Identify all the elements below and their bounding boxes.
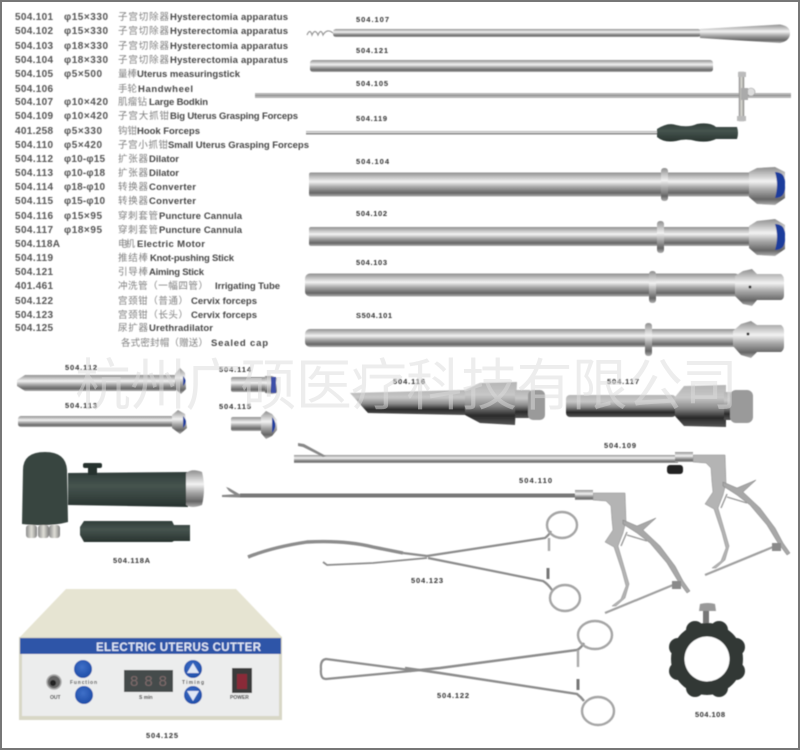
row 504.109: Big Uterus Grasping Forceps — [170, 111, 298, 122]
row 504.119: Knot-pushing Stick — [150, 253, 235, 264]
timing buttons — [182, 660, 204, 704]
row 504.105: φ5×500 — [64, 69, 102, 80]
row 504.116: φ15×95 — [64, 211, 102, 222]
instrument: 504.113 dilator: 504.113 — [65, 401, 97, 410]
instrument: 504.109 big grasping forceps — [294, 441, 790, 575]
row 504.102 — [15, 25, 288, 37]
instrument: 504.107 large bodkin: 504.107 — [356, 15, 389, 24]
row 504.112 — [15, 153, 179, 165]
instrument: 504.118A electric motor — [22, 452, 204, 565]
row 504.122 — [15, 295, 257, 307]
row 401.258 — [15, 125, 200, 137]
row 504.106 — [15, 83, 193, 95]
watermark: 杭州广硕医疗科技有限公司 — [75, 354, 738, 417]
row 401.461: 401.461 — [15, 281, 53, 292]
instrument: 504.114 converter: 504.114 — [219, 365, 252, 374]
row 504.101: 504.101 — [15, 12, 53, 23]
row 504.113: Dilator — [149, 168, 179, 179]
row 504.125: 尿扩器 — [118, 322, 148, 334]
row 504.114: Converter — [149, 182, 196, 193]
row 504.117: 504.117 — [15, 225, 53, 236]
row 504.103: Hysterectomia apparatus — [170, 41, 288, 52]
instrument: 504.110 small grasping forceps: 504.110 — [519, 476, 552, 485]
row 504.116: 504.116 — [15, 211, 53, 222]
instrument: 504.105 measuring stick: 504.105 — [356, 79, 388, 88]
instrument: 504.122 cervix forceps: 504.122 — [437, 691, 469, 700]
row 504.104: 子宫切除器 — [118, 54, 169, 66]
instrument: 504.123 cervix forceps long: 504.123 — [411, 576, 443, 585]
row 504.101: φ15×330 — [64, 12, 108, 23]
row 504.115: φ15-φ10 — [64, 196, 105, 207]
row 504.115: Converter — [149, 196, 196, 207]
row 504.122: 504.122 — [15, 296, 53, 307]
console title: ELECTRIC UTERUS CUTTER — [96, 642, 262, 654]
row 504.104: 504.104 — [15, 55, 53, 66]
row 504.106: Handwheel — [138, 84, 193, 95]
row 504.105: 量棒 — [118, 68, 137, 80]
instrument: 504.108 sealed wheel — [669, 603, 745, 719]
row 504.113: φ10-φ18 — [64, 168, 105, 179]
row 504.112: 504.112 — [15, 154, 53, 165]
row 504.119: 推结棒 — [118, 252, 148, 264]
instrument: 504.112 dilator: 504.112 — [65, 363, 97, 372]
row 401.258: φ5×330 — [64, 126, 102, 137]
power switch — [230, 668, 252, 701]
row 504.121: 引导棒 — [118, 266, 148, 278]
instrument: 504.112 dilator — [17, 363, 186, 394]
row 504.112: Dilator — [149, 154, 179, 165]
instrument: 504.113 dilator — [18, 401, 187, 434]
instrument: 504.105 measuring stick — [255, 72, 791, 121]
power switch: POWER — [230, 695, 249, 701]
row 504.119: 504.119 — [15, 253, 53, 264]
row 504.109: 子宫大抓钳 — [118, 110, 169, 122]
row 504.101 — [15, 11, 288, 23]
row 504.117: 穿刺套管 — [118, 224, 158, 236]
row 504.103: φ18×330 — [64, 41, 108, 52]
row 504.125: 504.125 — [15, 323, 53, 334]
row 504.118A — [15, 238, 205, 250]
row 504.117: Puncture Cannula — [159, 225, 243, 236]
row 504.103: 子宫切除器 — [118, 40, 169, 52]
digital display: S min — [139, 695, 153, 701]
row 504.121: 504.121 — [15, 267, 53, 278]
row 504.103 — [15, 40, 288, 52]
row 504.114 — [15, 181, 196, 193]
row 504.102: 504.102 — [15, 26, 53, 37]
instrument: 504.101 hysterectomy tube — [305, 311, 784, 358]
instrument: 504.114 converter — [219, 365, 277, 394]
row 504.118A: 电机 — [118, 238, 135, 250]
row 504.112: φ10-φ15 — [64, 154, 105, 165]
instrument: 504.102 hysterectomy tube: 504.102 — [356, 209, 387, 218]
row 504.119 — [15, 252, 235, 264]
instrument: 504.119 knot-pushing stick — [306, 114, 738, 142]
label 504.125: 504.125 — [146, 731, 178, 740]
row 504.102: Hysterectomia apparatus — [170, 26, 288, 37]
parts list table — [15, 11, 309, 349]
row 504.112: 扩张器 — [118, 153, 148, 165]
row 504.102: φ15×330 — [64, 26, 108, 37]
row 504.106: 504.106 — [15, 84, 53, 95]
row 504.123 — [15, 309, 257, 321]
row 504.107: Large Bodkin — [149, 97, 208, 108]
row 504.125: Urethradilator — [149, 323, 213, 334]
instrument: 504.101 hysterectomy tube: S504.101 — [356, 311, 392, 320]
row 504.115: 504.115 — [15, 196, 53, 207]
row 401.258: Hook Forceps — [137, 126, 200, 137]
instrument: 504.109 big grasping forceps: 504.109 — [604, 441, 636, 450]
row 504.101: Hysterectomia apparatus — [170, 12, 288, 23]
row 504.114: 转换器 — [118, 181, 148, 193]
output socket: OUT — [50, 695, 61, 701]
row 401.258: 401.258 — [15, 126, 53, 137]
row 504.122: 宫颈钳（普通） — [118, 295, 188, 307]
row 504.116: 穿刺套管 — [118, 210, 158, 222]
digital display: 888 — [130, 673, 167, 690]
instrument: 504.115 converter: 504.115 — [219, 402, 251, 411]
row 504.105: Uterus measuringstick — [137, 69, 241, 80]
instrument: 504.103 hysterectomy tube — [305, 258, 784, 306]
row 504.107: 肌瘤钻 — [118, 96, 147, 108]
row 504.102: 子宫切除器 — [118, 25, 169, 37]
row 504.123: 504.123 — [15, 310, 53, 321]
row 504.107 — [15, 96, 208, 108]
row 504.117 — [15, 224, 243, 236]
row 504.103: 504.103 — [15, 41, 53, 52]
digital display — [124, 670, 173, 701]
row 504.118A: Electric Motor — [137, 239, 205, 250]
row 504.107: φ10×420 — [64, 97, 108, 108]
instrument: 504.118A electric motor: 504.118A — [113, 556, 151, 565]
row 504.114: φ18-φ10 — [64, 182, 105, 193]
row 504.101: 子宫切除器 — [118, 11, 169, 23]
output socket — [47, 675, 61, 701]
row 401.258: 钩钳 — [118, 125, 137, 137]
row 504.125 — [15, 322, 213, 334]
instrument: 504.108 sealed wheel: 504.108 — [695, 710, 725, 719]
row 401.461: Irrigating Tube — [215, 281, 280, 292]
instrument: 504.116 cannula — [350, 377, 545, 425]
row 504.104: Hysterectomia apparatus — [170, 55, 288, 66]
row 504.118A: 504.118A — [15, 239, 60, 250]
row 504.107: 504.107 — [15, 97, 53, 108]
instrument: 504.104 hysterectomy tube — [309, 157, 785, 205]
device: electric uterus cutter console — [19, 589, 282, 720]
row 504.106: 手轮 — [118, 83, 137, 95]
row 504.109: 504.109 — [15, 111, 53, 122]
function buttons — [70, 660, 97, 704]
row 504.115: 转换器 — [118, 195, 148, 207]
instrument: 504.116 cannula: 504.116 — [393, 377, 425, 386]
row 504.121: Aiming Stick — [149, 267, 205, 278]
row 504.114: 504.114 — [15, 182, 53, 193]
instrument: 504.121 aiming stick — [310, 46, 713, 72]
row sealed cap — [121, 337, 268, 349]
instrument: 504.121 aiming stick: 504.121 — [356, 46, 388, 55]
row 504.110: Small Uterus Grasping Forceps — [168, 140, 309, 151]
instrument: 504.122 cervix forceps — [321, 621, 614, 725]
function buttons: Function — [70, 680, 97, 686]
row 504.122: Cervix forceps — [191, 296, 257, 307]
instrument: 504.117 cannula — [566, 377, 753, 427]
instrument: 504.104 hysterectomy tube: 504.104 — [356, 157, 390, 166]
instrument: 504.123 cervix forceps long — [248, 512, 580, 611]
row 504.123: 宫颈钳（长头） — [118, 309, 188, 321]
row 504.115 — [15, 195, 196, 207]
row 504.113 — [15, 167, 179, 179]
row 504.121 — [15, 266, 205, 278]
row 504.105: 504.105 — [15, 69, 53, 80]
row sealed cap: Sealed cap — [211, 338, 268, 349]
row 504.123: Cervix forceps — [191, 310, 257, 321]
instrument: 504.115 converter — [219, 402, 277, 439]
row 504.110: φ5×420 — [64, 140, 102, 151]
row 504.110: 504.110 — [15, 140, 53, 151]
instrument: 504.102 hysterectomy tube — [309, 209, 785, 256]
row 401.461: 冲洗管（一幅四管） — [118, 280, 208, 292]
instrument: 504.103 hysterectomy tube: 504.103 — [356, 258, 387, 267]
instrument: 504.117 cannula: 504.117 — [607, 377, 639, 386]
timing buttons: Timing — [182, 680, 204, 686]
instrument: 504.107 large bodkin — [307, 15, 790, 43]
row 504.113: 扩张器 — [118, 167, 148, 179]
row 401.461 — [15, 280, 280, 292]
row 504.110 — [15, 139, 309, 151]
row 504.116: Puncture Cannula — [159, 211, 243, 222]
row 504.117: φ18×95 — [64, 225, 102, 236]
row 504.104: φ18×330 — [64, 55, 108, 66]
row 504.110: 子宫小抓钳 — [118, 139, 168, 151]
row 504.104 — [15, 54, 288, 66]
row 504.116 — [15, 210, 243, 222]
row 504.109: φ10×420 — [64, 111, 108, 122]
row 504.105 — [15, 68, 241, 80]
instrument: 504.110 small grasping forceps — [222, 476, 690, 613]
row 504.109 — [15, 110, 298, 122]
instrument: 504.119 knot-pushing stick: 504.119 — [356, 114, 387, 123]
row 504.113: 504.113 — [15, 168, 53, 179]
row sealed cap: 各式密封帽（赠送） — [121, 337, 208, 349]
